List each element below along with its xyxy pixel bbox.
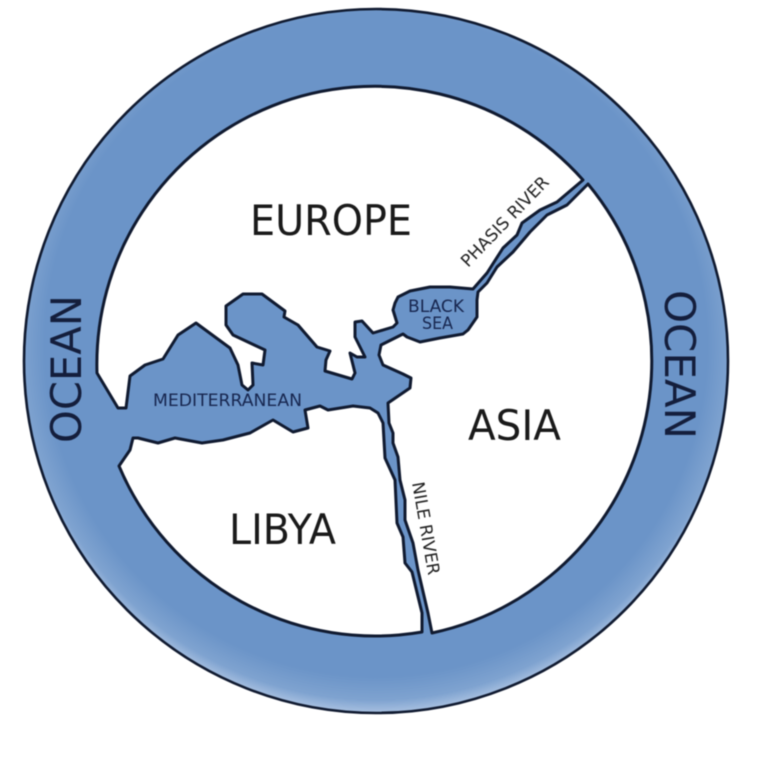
label: Ocean right: OCEAN <box>655 290 704 439</box>
label: Ocean left: OCEAN <box>42 295 91 443</box>
label: Asia: ASIA <box>468 401 561 450</box>
label: Nile River: NILE RIVER <box>407 480 443 577</box>
label: Libya: LIBYA <box>229 505 336 554</box>
label: Mediterranean: MEDITERRANEAN <box>153 391 302 411</box>
label: Phasis River: PHASIS RIVER <box>457 173 554 271</box>
land: Libya <box>119 406 422 636</box>
land: Europe <box>97 86 583 408</box>
label: Black Sea: SEA <box>422 314 453 334</box>
label: Black Sea: BLACK <box>408 297 465 317</box>
label: Europe: EUROPE <box>250 196 412 245</box>
land: Asia <box>379 184 652 633</box>
